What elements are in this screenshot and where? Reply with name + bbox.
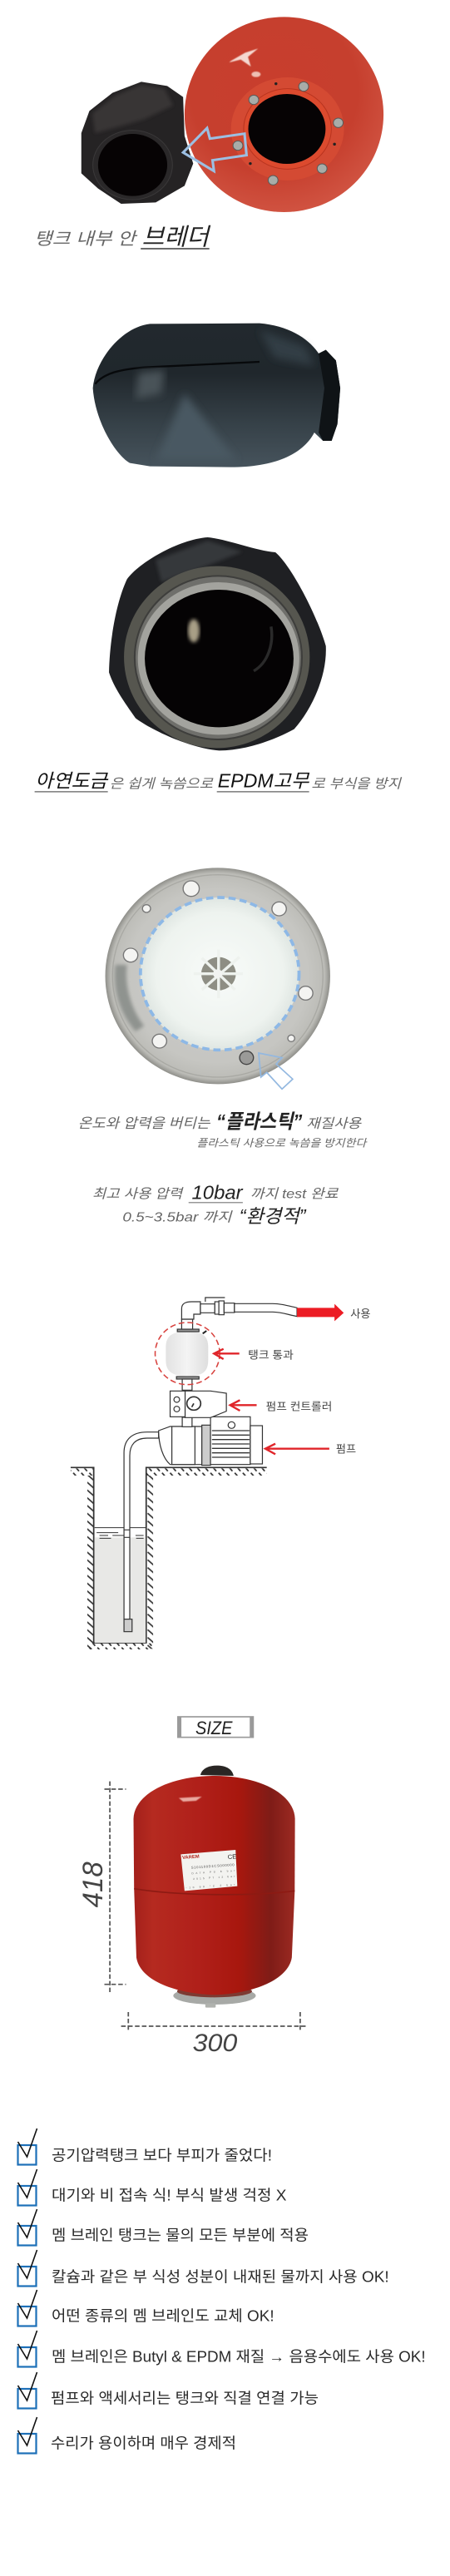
product label: S101100D1CS000000 <box>191 1862 235 1870</box>
tank <box>166 1319 208 1390</box>
caption: max working pressure: 0.5~3.5bar 까지 <box>122 1210 234 1225</box>
diagram: pump installation <box>71 1298 370 1649</box>
arrow: blue outline pointing to bladder <box>183 128 246 171</box>
label: passes through tank: 탱크 통과 <box>248 1349 294 1361</box>
plastic insert <box>141 897 299 1050</box>
photo: red tank half <box>185 17 383 212</box>
caption: max working pressure: 10bar <box>192 1182 244 1203</box>
arrow: to use <box>297 1304 344 1321</box>
item 2 <box>18 2169 286 2206</box>
label: pump: 펌프 <box>336 1443 356 1456</box>
pump <box>159 1417 262 1466</box>
photo: bladder side view <box>93 324 340 467</box>
item 5: 어떤 종류의 멤 브레인도 교체 OK! <box>52 2307 274 2324</box>
label: use: 사용 <box>350 1308 370 1320</box>
item 3: 멤 브레인 탱크는 물의 모든 부분에 적용 <box>52 2227 309 2244</box>
ground and well <box>71 1467 267 1649</box>
product label: -10 99 °C 2 bar <box>185 1883 235 1890</box>
panel: tank and bladder photo <box>82 17 383 212</box>
top pipe with fittings <box>181 1298 297 1319</box>
caption: plastic material: 온도와 압력을 버티는 <box>78 1115 211 1131</box>
dimension: height 418: 418 <box>78 1862 109 1907</box>
label: pump controller: 펌프 컨트롤러 <box>266 1401 332 1412</box>
product label: CE <box>227 1852 237 1861</box>
heading: bladder inside tank <box>34 225 211 251</box>
caption: plastic material: 플라스틱 사용으로 녹씀을 방지한다 <box>196 1137 368 1150</box>
caption: zinc plating vs EPDM rubber: EPDM고무 <box>218 770 310 792</box>
bolts <box>233 82 344 185</box>
holes <box>123 881 313 1048</box>
caption: plastic material: “플라스틱” <box>216 1111 303 1134</box>
heading: size: SIZE <box>195 1718 233 1738</box>
caption: zinc plating vs EPDM rubber: 아연도금 <box>35 770 109 792</box>
heading: size <box>178 1717 253 1738</box>
item 1: 공기압력탱크 보다 부피가 줄었다! <box>52 2148 272 2164</box>
arrow: blue outline pointing to insert <box>259 1053 293 1089</box>
checklist <box>18 2129 426 2454</box>
product label: VAREM <box>182 1855 200 1861</box>
dimension: width 300 <box>121 2012 307 2057</box>
item 1 <box>18 2129 272 2164</box>
item 4 <box>18 2250 389 2286</box>
item 5 <box>18 2290 274 2326</box>
dimension: width 300: 300 <box>193 2030 237 2057</box>
arrow: controller <box>230 1400 257 1411</box>
product label: 2015 PT 12 bar <box>193 1875 235 1881</box>
item 3 <box>18 2209 309 2246</box>
caption: max working pressure: “환경적” <box>240 1205 307 1227</box>
caption: zinc plating vs EPDM rubber: 은 쉽게 녹씀으로 <box>110 777 214 791</box>
photo: bladder opening with zinc ring <box>109 537 326 750</box>
arrow: tank <box>214 1349 240 1359</box>
caption: plastic material <box>78 1111 368 1150</box>
item 8 <box>18 2417 236 2454</box>
caption: max working pressure: 까지 test 완료 <box>250 1187 339 1201</box>
caption: max working pressure: 최고 사용 압력 <box>92 1187 184 1201</box>
caption: plastic material: 재질사용 <box>306 1116 362 1131</box>
photo: red expansion tank <box>134 1766 295 2008</box>
item 6: 멤 브레인은 Butyl & EPDM 재질 → 음용수에도 사용 OK! <box>52 2349 426 2366</box>
caption: zinc plating vs EPDM rubber <box>35 770 403 793</box>
product label: DATA PS 8 bar <box>191 1869 235 1875</box>
item 2: 대기와 비 접속 식! 부식 발생 걱정 X <box>52 2188 286 2204</box>
item 7: 펌프와 액세서리는 탱크와 직결 연결 가능 <box>51 2391 319 2407</box>
heading: bladder inside tank: 탱크 내부 안 <box>34 230 138 249</box>
suction pipe <box>124 1432 159 1632</box>
photo: flange with plastic insert <box>106 868 330 1089</box>
item 4: 칼슘과 같은 부 식성 성분이 내재된 물까지 사용 OK! <box>52 2269 389 2286</box>
caption: max working pressure <box>92 1182 339 1227</box>
dimension: height 418 <box>78 1782 126 1992</box>
product label <box>180 1850 237 1891</box>
item 6 <box>18 2331 426 2367</box>
controller <box>171 1391 226 1417</box>
item 8: 수리가 용이하며 매우 경제적 <box>51 2435 236 2452</box>
dashed highlight circle <box>156 1323 220 1385</box>
item 7 <box>18 2372 319 2409</box>
heading: bladder inside tank: 브레더 <box>142 225 211 251</box>
caption: zinc plating vs EPDM rubber: 로 부식을 방지 <box>311 777 403 791</box>
photo: black bladder <box>82 82 193 204</box>
arrow: pump <box>265 1444 329 1454</box>
